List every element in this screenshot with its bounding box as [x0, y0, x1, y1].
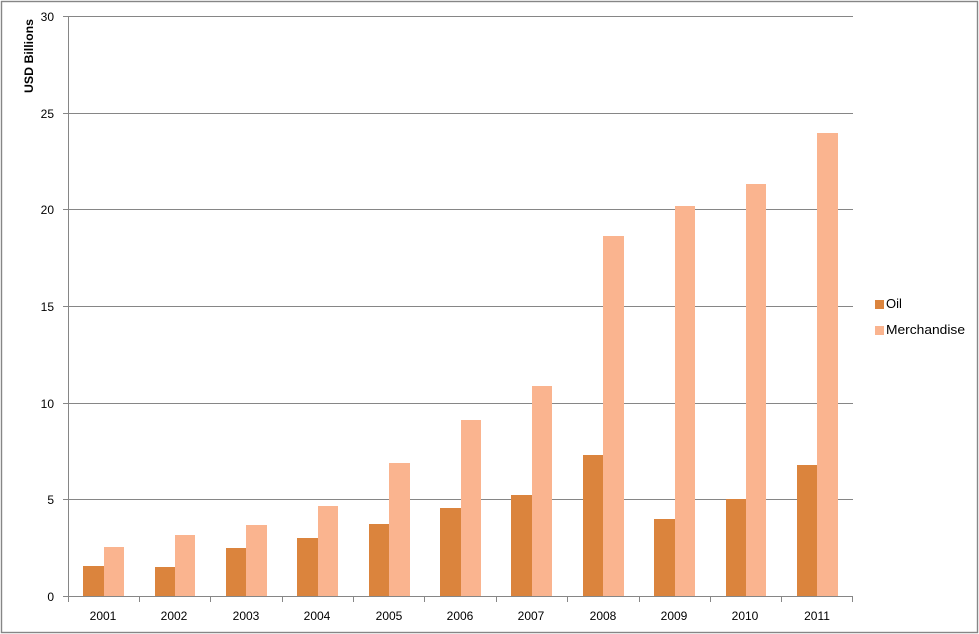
legend: Oil: [886, 296, 902, 311]
x axis labels: [90, 609, 830, 623]
oil bars: [83, 455, 817, 596]
x axis labels: 2010: [732, 609, 759, 623]
x axis labels: 2006: [447, 609, 474, 623]
y axis labels: 10: [41, 397, 54, 411]
x axis labels: 2004: [304, 609, 331, 623]
y axis title: USD Billions: [22, 19, 36, 93]
y axis labels: 5: [47, 493, 54, 507]
x axis labels: 2008: [590, 609, 617, 623]
x axis labels: 2007: [518, 609, 545, 623]
x axis labels: 2011: [804, 609, 830, 623]
y axis labels: 15: [41, 300, 54, 314]
y axis labels: 0: [47, 590, 54, 604]
x axis labels: 2002: [161, 609, 188, 623]
legend: Merchandise: [886, 322, 965, 337]
y axis labels: 20: [41, 203, 54, 217]
legend: [875, 296, 965, 337]
y axis labels: 30: [41, 10, 54, 24]
x axis labels: 2003: [233, 609, 260, 623]
y axis labels: 25: [41, 107, 54, 121]
x axis labels: 2005: [376, 609, 403, 623]
x axis labels: 2009: [661, 609, 688, 623]
y axis labels: [41, 10, 54, 604]
merchandise bars: [104, 133, 838, 596]
x axis labels: 2001: [90, 609, 117, 623]
